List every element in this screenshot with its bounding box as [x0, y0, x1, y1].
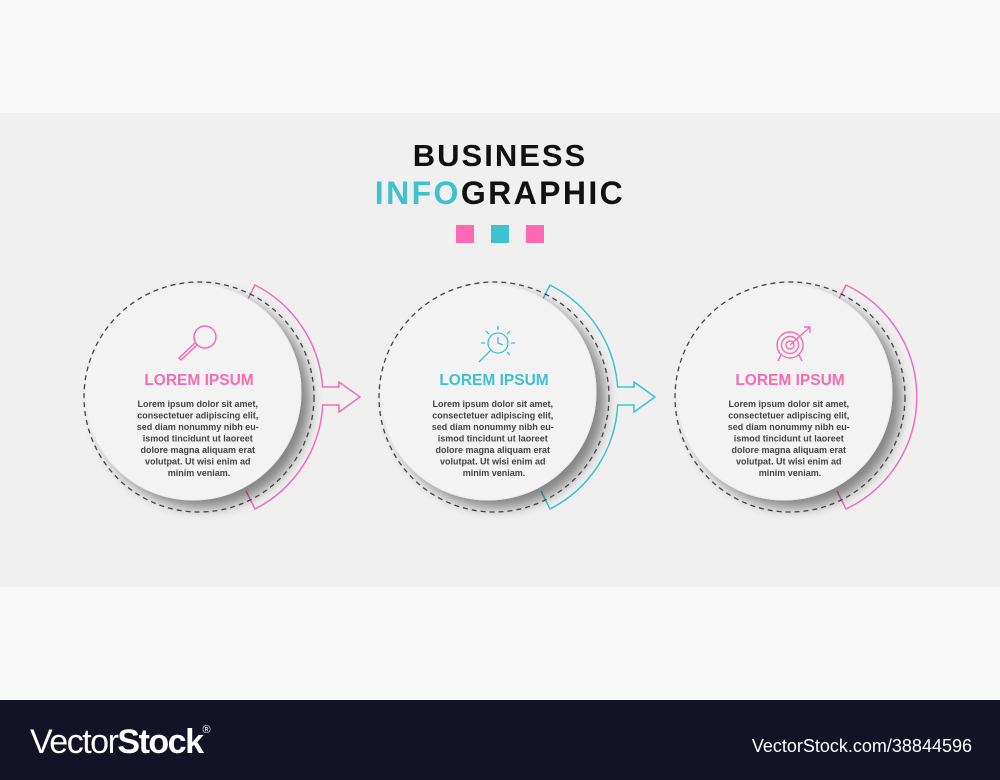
body text: volutpat. Ut wisi enim ad: [145, 456, 250, 466]
body text: dolore magna aliquam erat: [435, 445, 550, 455]
title: INFOGRAPHIC: [375, 175, 625, 211]
icon: magnifier: [179, 326, 216, 360]
body text: consectetuer adipiscing elit,: [137, 410, 258, 420]
background band: [0, 113, 1000, 587]
pink arc with arrow: [246, 285, 360, 509]
footer bar: VectorStock.com/38844596: [752, 736, 972, 756]
icon: light bulb: [479, 326, 515, 362]
white circle: [380, 284, 596, 500]
body text: Lorem ipsum dolor sit amet,: [432, 399, 553, 409]
body text: ismod tincidunt ut laoreet: [734, 434, 844, 444]
white circle: [85, 284, 301, 500]
icon: target: [777, 327, 810, 361]
body text: minim veniam.: [168, 468, 230, 478]
body text: ismod tincidunt ut laoreet: [438, 434, 548, 444]
heading: LOREM IPSUM: [735, 372, 845, 389]
footer bar: ®: [202, 724, 210, 736]
title: [375, 138, 625, 211]
decorative squares: [456, 225, 544, 243]
body text: dolore magna aliquam erat: [731, 445, 846, 455]
heading: LOREM IPSUM: [144, 372, 254, 389]
dashed ring: [675, 282, 905, 512]
footer bar: [0, 700, 1000, 780]
body text: Lorem ipsum dolor sit amet,: [137, 399, 258, 409]
body text: sed diam nonummy nibh eu-: [728, 422, 850, 432]
body text: sed diam nonummy nibh eu-: [432, 422, 554, 432]
body text: consectetuer adipiscing elit,: [432, 410, 553, 420]
title: BUSINESS: [413, 138, 587, 173]
heading: LOREM IPSUM: [439, 372, 549, 389]
body text: sed diam nonummy nibh eu-: [137, 422, 259, 432]
body text: dolore magna aliquam erat: [140, 445, 255, 455]
body text: volutpat. Ut wisi enim ad: [736, 456, 842, 466]
dashed ring: [379, 282, 609, 512]
step 1: [84, 282, 360, 512]
body text: minim veniam.: [759, 468, 821, 478]
white circle: [676, 284, 892, 500]
step 3: [675, 282, 917, 512]
pink arc: [837, 285, 917, 509]
body text: Lorem ipsum dolor sit amet,: [728, 399, 849, 409]
body text: minim veniam.: [463, 468, 525, 478]
footer bar: VectorStock: [30, 723, 202, 761]
body text: ismod tincidunt ut laoreet: [143, 434, 253, 444]
step 2: [379, 282, 655, 512]
teal arc with arrow: [541, 285, 655, 509]
dashed ring: [84, 282, 314, 512]
body text: consectetuer adipiscing elit,: [728, 410, 849, 420]
body text: volutpat. Ut wisi enim ad: [440, 456, 546, 466]
